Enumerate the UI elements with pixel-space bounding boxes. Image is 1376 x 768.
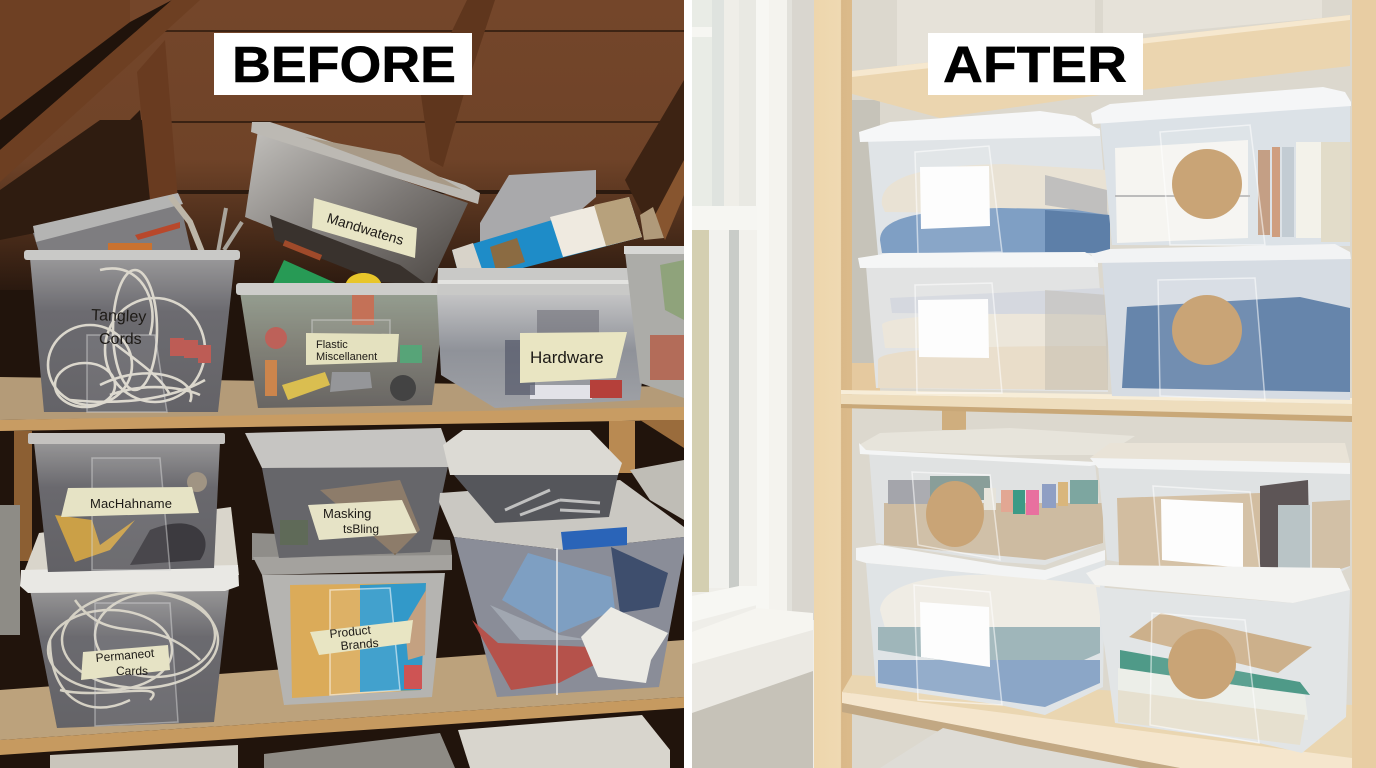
bin: permanent cords [20, 507, 239, 728]
bin: tangled cords: Tangley [91, 307, 147, 326]
bin: small fasteners [443, 430, 622, 523]
bin: blue sweater and kraft circle [1091, 244, 1351, 400]
bin: plastic miscellaneous: Flastic [316, 339, 348, 351]
bin: white cards and kraft circle [1091, 87, 1351, 246]
bin: clothes [439, 480, 684, 697]
upper shelf [0, 377, 684, 431]
bin: tangled cords [24, 250, 240, 412]
divider gap [684, 0, 692, 768]
bin: loose lid behind hardware [480, 170, 596, 250]
bottom row bins [50, 715, 670, 768]
middle shelf [841, 390, 1352, 422]
attic rafters [0, 0, 684, 240]
bin: MacHahname: MacHahname [90, 496, 172, 511]
window [692, 0, 814, 768]
bottom bin under shelf [880, 728, 1140, 768]
cereal box [452, 197, 664, 275]
back wall [850, 0, 1352, 768]
bin: permanent cords: Permaneot [95, 646, 155, 665]
far-right clipped lower bin [630, 460, 684, 520]
bin: striped towels [858, 252, 1108, 393]
bin: masking tape: tsBling [343, 522, 379, 536]
bin: product brands [252, 533, 452, 705]
lower shelf [0, 640, 684, 755]
bin: cream and blue towels [859, 111, 1110, 255]
bin: masking tape [245, 428, 450, 558]
panel: before (attic shelves) [0, 0, 684, 768]
bin: tangled cords: Cords [99, 331, 142, 348]
bin: far-right clipped [624, 246, 684, 398]
bin: small tilted lid bin behind tangled cords [33, 193, 242, 255]
bin: white and teal towels [856, 545, 1105, 715]
bin: product brands: Brands [340, 636, 379, 653]
shelf uprights [14, 420, 684, 561]
bin: tilted Mandwatens [245, 122, 480, 285]
bin: plastic miscellaneous: Miscellanent [316, 351, 377, 363]
bin: masking tape: Masking [323, 506, 371, 521]
bin: cardboard file box [1090, 443, 1350, 588]
shelf posts [814, 0, 1376, 768]
panel: after (bright shelves) [692, 0, 1376, 768]
bin: craft supplies with kraft circle [859, 428, 1135, 565]
title: BEFORE: BEFORE [232, 36, 456, 93]
bin: product brands: Product [329, 623, 372, 641]
boxes on top [897, 0, 1322, 68]
attic wood plank wall [0, 0, 684, 290]
title: AFTER: AFTER [943, 36, 1127, 93]
bin: plastic miscellaneous [236, 260, 450, 408]
bin: hardware [437, 268, 654, 408]
top shelf [843, 15, 1350, 118]
bottom shelf [842, 675, 1352, 768]
bin: tilted Mandwatens: Mandwatens [325, 210, 406, 248]
bin: stacked books with kraft circle [1086, 565, 1350, 753]
bin: MacHahname [28, 433, 225, 572]
bin: permanent cords: Cards [116, 664, 148, 678]
bin: hardware: Hardware [530, 348, 604, 367]
